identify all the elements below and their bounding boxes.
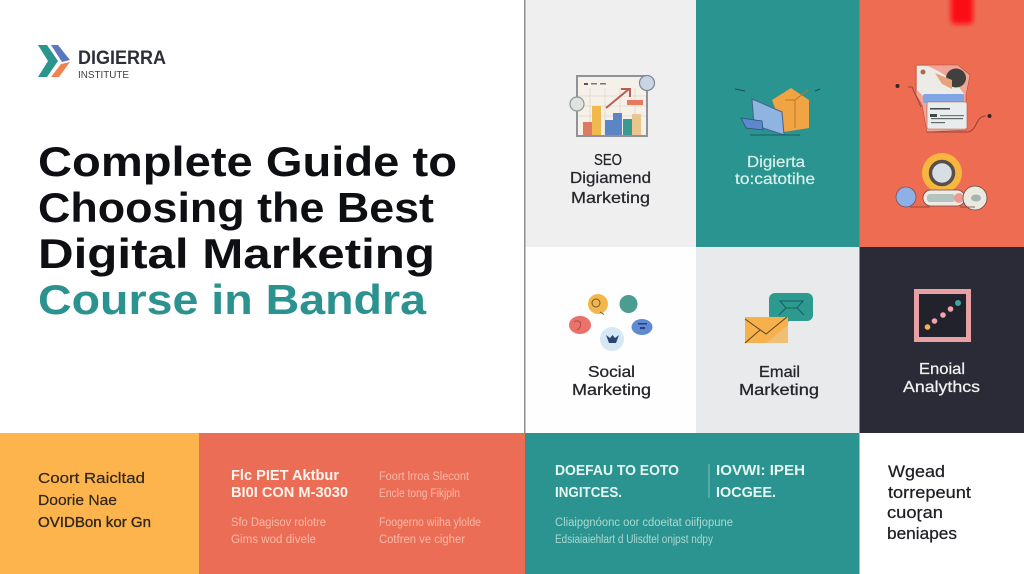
label: teal panel: to:catotihe xyxy=(735,171,815,188)
text: teal footer details xyxy=(555,517,733,546)
heading: teal footer xyxy=(555,462,805,501)
heading: teal footer: IOVWI: IPEH xyxy=(716,462,805,479)
panel: SEO xyxy=(526,0,696,247)
icon: badge and pills xyxy=(896,153,987,210)
panel: coral xyxy=(860,0,1024,247)
label: SEO xyxy=(570,152,651,207)
icon: social bubbles xyxy=(569,294,652,351)
label: SEO: Marketing xyxy=(571,190,650,207)
heading: teal footer: INGITCES. xyxy=(555,484,622,501)
panel: yellow footer xyxy=(0,433,199,574)
label: Social Marketing: Marketing xyxy=(572,382,651,399)
panel: coral footer xyxy=(199,433,525,574)
title: Complete Guide to xyxy=(38,138,457,185)
text: coral footer details: Sfo Dagisov rolotre xyxy=(231,517,326,529)
text: teal footer details: Cliaipgnóonc oor cdoeitat oiifjopune xyxy=(555,517,733,529)
label: Email Marketing: Marketing xyxy=(739,382,819,399)
text: coral footer details: Foort lrroa Slecont xyxy=(379,471,470,483)
label: teal panel: Digierta xyxy=(747,154,805,171)
text: coral footer details xyxy=(231,471,481,546)
heading: course date: BI0I CON M-3030 xyxy=(231,484,348,501)
icon: envelope and chat bubble xyxy=(745,293,813,343)
text: coral footer details: Encle tong Fikjpln xyxy=(379,488,460,500)
text: coral footer details: Foogerno wiiha ylolde xyxy=(379,517,481,529)
red blob xyxy=(951,0,973,24)
text: yellow footer: Doorie Nae xyxy=(38,492,117,509)
panel: social marketing xyxy=(526,247,696,433)
title: Digital Marketing xyxy=(38,230,435,277)
panel: email marketing xyxy=(696,247,860,433)
label: SEO: Digiamend xyxy=(570,170,651,187)
text: white footer: torrepeunt xyxy=(888,483,971,502)
text: white footer xyxy=(887,462,971,543)
label: Email Marketing: Email xyxy=(759,364,800,381)
heading: teal footer: IOCGEE. xyxy=(716,484,776,501)
text: yellow footer xyxy=(38,470,151,531)
heading: course date: Flc PIET Aktbur xyxy=(231,467,339,484)
icon: devices xyxy=(735,88,820,135)
label: analytics: Analythcs xyxy=(903,379,980,396)
label: Email Marketing xyxy=(739,364,819,399)
text: teal footer details: Edsiaiaiehlart d Ulisdtel onjpst ndpy xyxy=(555,534,713,546)
panel: analytics xyxy=(860,247,1024,433)
label: Social Marketing: Social xyxy=(588,364,635,381)
label: analytics xyxy=(903,361,980,396)
heading: course date xyxy=(231,467,348,501)
panel: teal footer xyxy=(525,433,860,574)
title xyxy=(38,138,457,323)
text: yellow footer: OVIDBon kor Gn xyxy=(38,514,151,531)
text: coral footer details: Cotfren ve cigher xyxy=(379,534,465,546)
title: Choosing the Best xyxy=(38,184,434,231)
heading: teal footer: DOEFAU TO EOTO xyxy=(555,462,679,479)
title: Course in Bandra xyxy=(38,276,427,323)
text: white footer: cuoɽan xyxy=(887,503,943,522)
icon: analytics frame xyxy=(916,292,968,340)
label: Social Marketing xyxy=(572,364,651,399)
label: teal panel xyxy=(735,154,815,188)
text: yellow footer: Coort Raicltad xyxy=(38,470,145,487)
icon: SEO bar chart xyxy=(570,76,654,136)
text: coral footer details: Gims wod divele xyxy=(231,534,316,546)
logo: INSTITUTE xyxy=(78,70,129,81)
text: white footer: Wgead xyxy=(888,462,945,481)
label: analytics: Enoial xyxy=(919,361,965,378)
icon: profile cards xyxy=(896,65,992,132)
logo xyxy=(38,45,166,81)
label: SEO: SEO xyxy=(594,152,622,169)
panel: teal xyxy=(696,0,860,247)
logo: DIGIERRA xyxy=(78,48,166,69)
text: white footer: beniapes xyxy=(887,524,957,543)
